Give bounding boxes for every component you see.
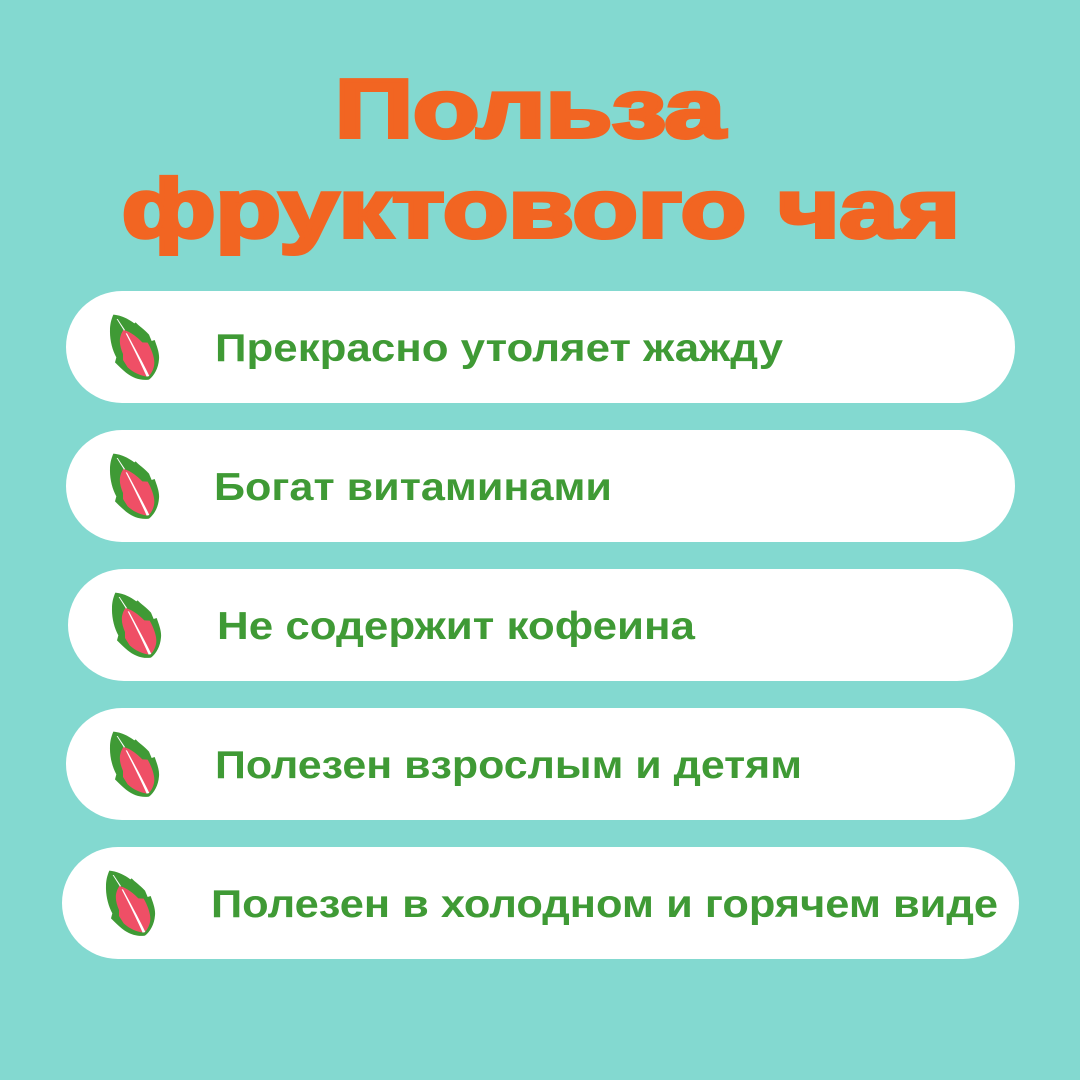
text: benefit 2: Богат витаминами bbox=[214, 466, 612, 509]
panel: benefit 5 bbox=[62, 847, 1019, 959]
title bbox=[122, 62, 960, 255]
icon: leaf 2 bbox=[110, 454, 159, 519]
text: benefit 4: Полезен взрослым и детям bbox=[215, 744, 802, 787]
icon: leaf 4 bbox=[110, 732, 159, 797]
text: benefit 5: Полезен в холодном и горячем виде bbox=[211, 883, 998, 926]
panel: benefit 4 bbox=[66, 708, 1015, 820]
title: фруктового bbox=[122, 162, 746, 255]
icon: leaf 3 bbox=[112, 593, 161, 658]
text: benefit 3: Не содержит кофеина bbox=[217, 605, 695, 648]
icon: leaf 5 bbox=[106, 871, 155, 936]
text: benefit 1: Прекрасно утоляет жажду bbox=[215, 327, 783, 370]
panel: benefit 2 bbox=[66, 430, 1015, 542]
title: чая bbox=[778, 162, 960, 255]
icon: leaf 1 bbox=[110, 315, 159, 380]
panel: benefit 3 bbox=[68, 569, 1013, 681]
panel: benefit 1 bbox=[66, 291, 1015, 403]
title: Польза bbox=[335, 62, 726, 155]
